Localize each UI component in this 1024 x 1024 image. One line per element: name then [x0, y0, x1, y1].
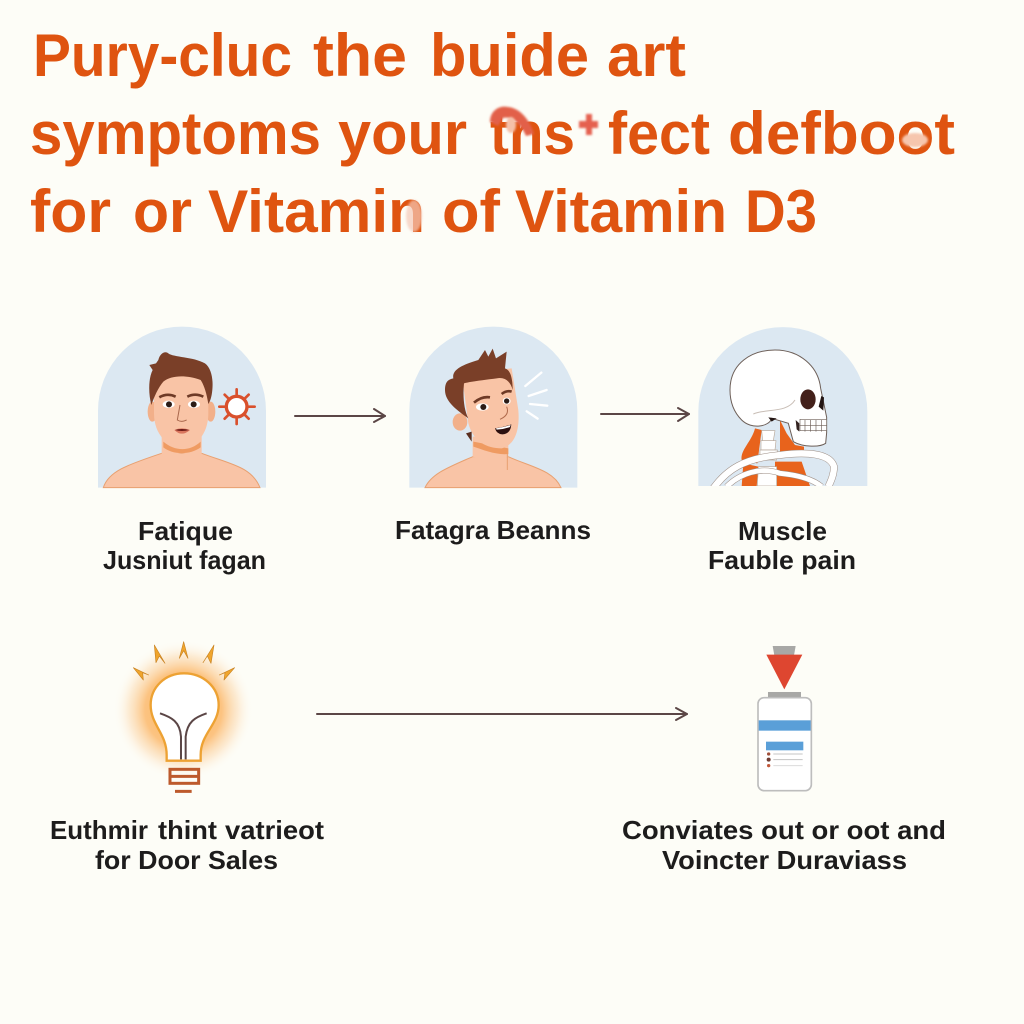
ribs — [713, 454, 834, 488]
title: Vitamin — [515, 178, 727, 245]
dropper cap — [773, 646, 796, 655]
label: fatigue: Fatique — [138, 516, 233, 546]
icon: light bulb — [113, 640, 253, 791]
label: bulb — [50, 815, 324, 875]
label: muscle pain: Muscle — [738, 516, 827, 546]
panel: fatigue — [98, 327, 266, 488]
blue band — [759, 720, 811, 731]
illustration: skeleton — [713, 350, 834, 488]
label lines — [767, 752, 803, 767]
title: fect — [608, 100, 710, 167]
bulb glow — [113, 640, 253, 780]
title: for — [30, 178, 111, 245]
label: bulb: vatrieot — [225, 815, 324, 845]
title: your — [338, 100, 467, 167]
label: bulb: for Door Sales — [95, 845, 278, 875]
bottle neck — [768, 692, 801, 699]
title: D3 — [745, 178, 817, 245]
title: or — [133, 178, 192, 245]
title: symptoms — [30, 100, 321, 167]
bulb glass — [151, 673, 219, 761]
label: fatigue: Jusniut fagan — [103, 545, 266, 575]
spine — [757, 431, 777, 486]
title: of — [442, 178, 501, 245]
icon: motion lines — [525, 373, 547, 419]
red triangle — [766, 655, 802, 689]
title: the — [313, 22, 407, 89]
label: muscle pain: Fauble pain — [708, 545, 856, 575]
label: muscle pain — [708, 516, 856, 575]
title: Vitamin — [208, 178, 425, 245]
arrow: fatigue to second symptom — [295, 409, 385, 422]
panel: second symptom — [409, 327, 577, 488]
title: buide — [430, 22, 589, 89]
skull — [730, 350, 827, 446]
icon: pain burst — [219, 389, 255, 424]
label: bulb: thint — [158, 815, 217, 845]
bulb base — [170, 769, 199, 791]
icon: tired man — [103, 352, 260, 488]
arrow: bulb to bottle — [317, 708, 687, 720]
label: bottle: Conviates out or oot and — [622, 815, 946, 845]
arch background — [98, 327, 266, 488]
title: defboot — [728, 100, 955, 167]
label block — [766, 742, 803, 750]
neck muscles — [741, 420, 810, 487]
label: second symptom: Fatagra Beanns — [395, 515, 591, 545]
panel: muscle pain — [698, 327, 867, 488]
filament — [160, 713, 207, 759]
title: art — [607, 22, 686, 89]
arch background — [698, 327, 867, 486]
arrow: second symptom to muscle pain — [601, 408, 689, 421]
rays — [133, 642, 235, 680]
title — [30, 22, 955, 245]
label: fatigue — [103, 516, 266, 575]
icon: supplement bottle — [758, 646, 811, 791]
title: tns — [490, 100, 575, 167]
label: bottle — [622, 815, 946, 875]
arch background — [409, 327, 577, 488]
label: bottle: Voincter Duraviass — [662, 845, 907, 875]
title: Pury-cluc — [33, 22, 292, 89]
label: bulb: Euthmir — [50, 815, 148, 845]
bottle body — [758, 698, 811, 791]
icon: talking man — [425, 349, 561, 488]
